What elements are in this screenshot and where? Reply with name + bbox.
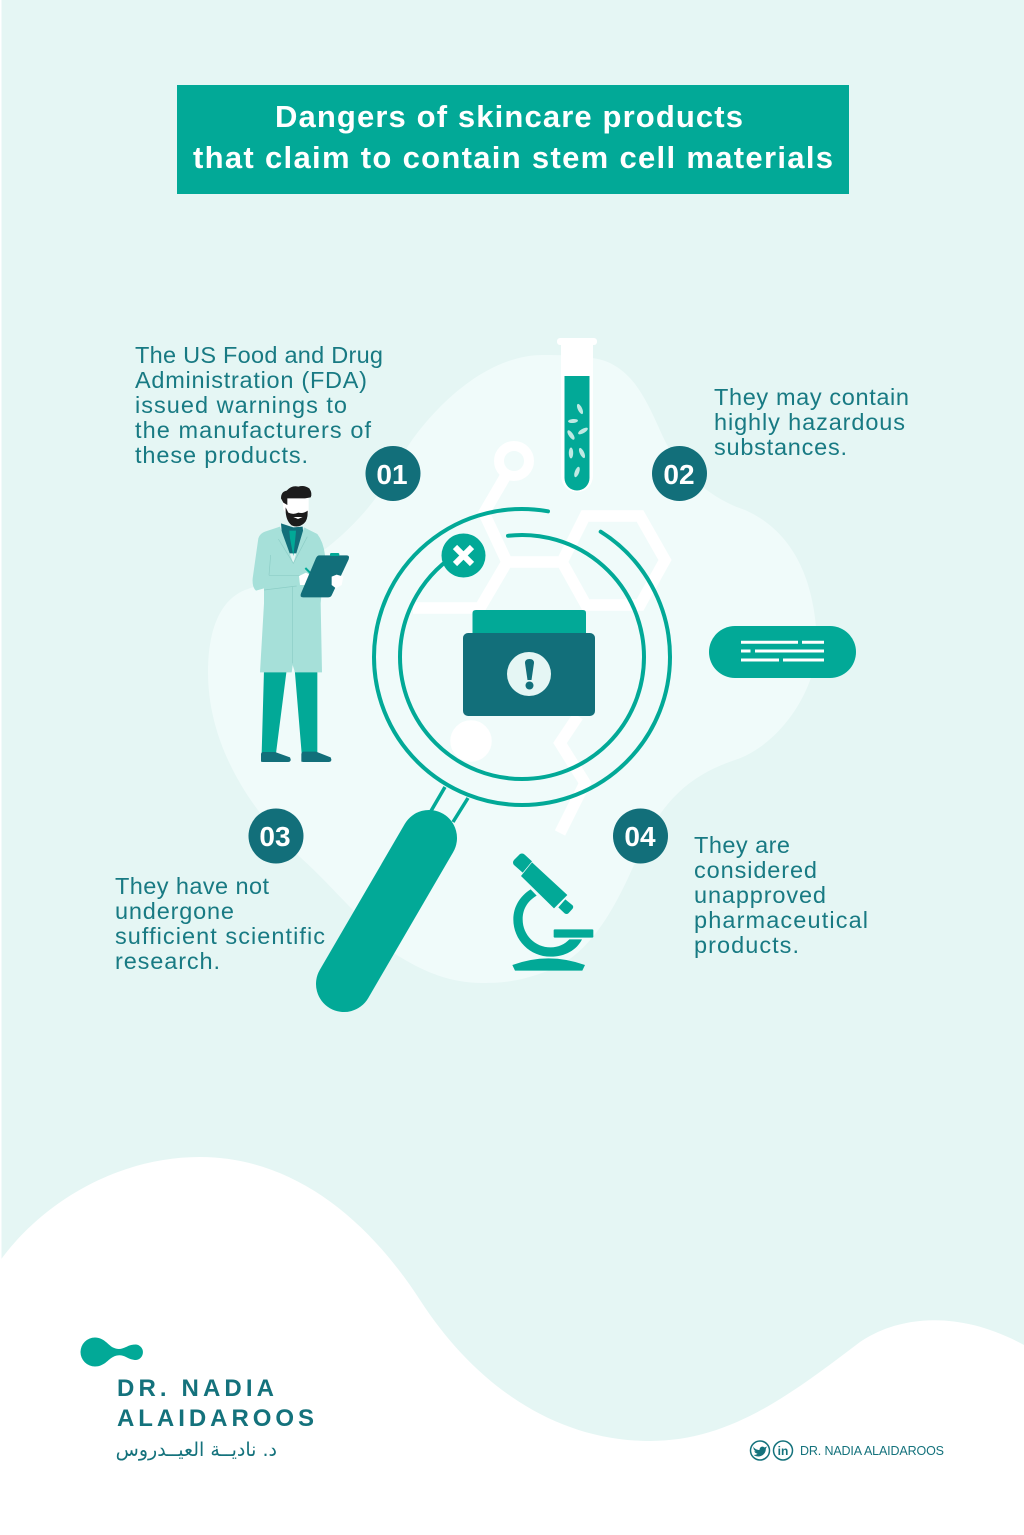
text block: point 02 <box>714 384 909 460</box>
text block: point 01: Administration (FDA) <box>135 367 367 393</box>
text block: point 01: the manufacturers of <box>135 417 371 443</box>
text block: point 04: They are <box>694 832 790 858</box>
number badge 04 <box>613 808 668 864</box>
magnifying glass <box>344 509 670 984</box>
icon: test tube <box>557 338 597 492</box>
face <box>283 496 309 520</box>
text block: point 03: research. <box>115 948 220 974</box>
text block: point 01: issued warnings to <box>135 392 347 418</box>
text block: point 01: The US Food and Drug <box>135 342 383 368</box>
warning icon <box>507 652 551 696</box>
text block: point 02: substances. <box>714 434 847 460</box>
title banner: Dangers of skincare products <box>275 99 743 134</box>
outer lens ring <box>374 509 670 805</box>
clipboard <box>301 555 349 597</box>
jar lid <box>472 610 586 633</box>
inner lens ring <box>400 535 644 779</box>
text block: point 04: pharmaceutical <box>694 907 868 933</box>
text block: point 03: sufficient scientific <box>115 923 325 949</box>
microscope stage <box>554 929 593 938</box>
shoes <box>261 752 331 762</box>
microscope tube <box>521 862 567 908</box>
logo mark <box>80 1338 143 1366</box>
icon: linkedin <box>774 1441 792 1460</box>
microscope base <box>512 958 585 971</box>
logo: ALAIDAROOS <box>117 1405 314 1432</box>
handle grip <box>344 838 429 984</box>
icon: microscope <box>512 853 593 971</box>
text block: point 02: highly hazardous <box>714 409 905 435</box>
lab coat <box>253 527 325 672</box>
number badge 03: 03 <box>259 821 291 852</box>
doctor illustration <box>253 486 349 762</box>
title banner: that claim to contain stem cell materials <box>193 140 833 175</box>
logo <box>80 1338 314 1461</box>
text block: point 01 <box>135 342 383 468</box>
icon: X badge <box>442 534 486 578</box>
handle connector <box>431 787 468 822</box>
number badge 04: 04 <box>624 821 656 852</box>
logo arabic name: د. ناديــة العيــدروس <box>116 1439 277 1461</box>
text block: point 04: products. <box>694 932 799 958</box>
number badge 03 <box>248 808 304 864</box>
footer handle: DR. NADIA ALAIDAROOS <box>800 1444 944 1458</box>
writing hand and pen <box>299 573 312 585</box>
tie <box>289 531 296 556</box>
text block: point 03 <box>115 873 325 974</box>
molecule hexagon lines <box>413 446 665 833</box>
microscope arm <box>513 889 582 957</box>
icon: twitter <box>750 1441 770 1460</box>
number badge 02: 02 <box>663 459 695 490</box>
trousers <box>262 665 317 753</box>
text block: point 02: They may contain <box>714 384 909 410</box>
text block: point 04: unapproved <box>694 882 826 908</box>
text pill icon <box>709 626 856 678</box>
jar body <box>463 633 595 716</box>
icon: linkedin: in <box>778 1444 788 1458</box>
text block: point 04: considered <box>694 857 817 883</box>
holding hand <box>332 575 343 588</box>
beard <box>286 507 308 526</box>
logo name: DR. NADIA <box>117 1375 274 1402</box>
neck and shirt <box>281 523 305 553</box>
number badge 02 <box>652 446 707 501</box>
text block: point 03: undergone <box>115 898 234 924</box>
bottom white wave <box>0 1157 1024 1535</box>
skincare jar with warning <box>463 610 595 716</box>
number badge 01 <box>366 446 420 501</box>
molecule ring <box>499 446 529 476</box>
hair <box>281 486 311 505</box>
text block: point 03: They have not <box>115 873 269 899</box>
title banner <box>177 85 849 194</box>
text block: point 04 <box>694 832 868 958</box>
number badge 01: 01 <box>376 459 408 490</box>
central pale blob <box>208 355 817 983</box>
text block: point 01: these products. <box>135 442 308 468</box>
social footer <box>750 1441 944 1460</box>
